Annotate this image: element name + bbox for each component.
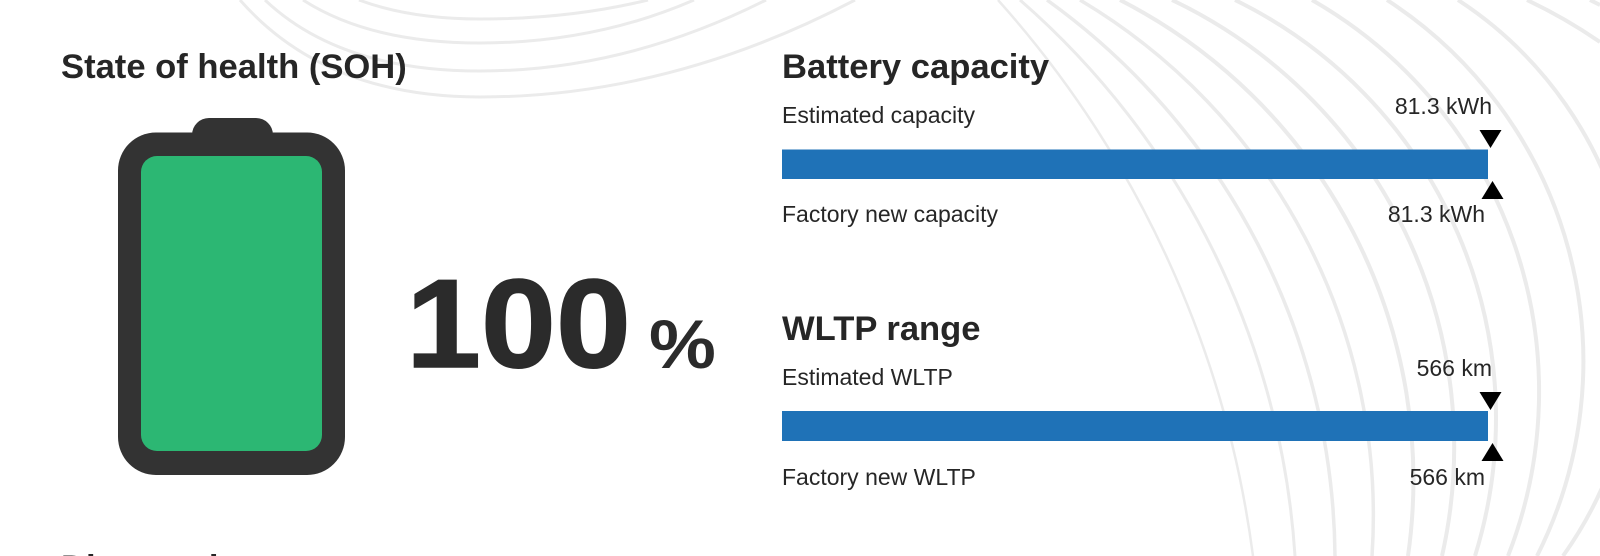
bar: WLTP range (782, 411, 1488, 441)
marker: estimated WLTP (1480, 392, 1502, 410)
value: factory new capacity: 81.3 kWh (1388, 201, 1485, 227)
SOH value: % (649, 307, 716, 383)
value: factory new WLTP: 566 km (1410, 464, 1485, 490)
heading: battery capacity: Battery capacity (782, 48, 1050, 86)
heading: state of health: State of health (SOH) (61, 48, 407, 86)
label: estimated WLTP: Estimated WLTP (782, 364, 953, 390)
value: estimated WLTP: 566 km (1417, 355, 1492, 381)
marker: factory WLTP (1482, 443, 1504, 461)
heading: WLTP range: WLTP range (782, 310, 981, 348)
icon: battery (118, 118, 345, 475)
SOH value: 100 (406, 253, 631, 394)
value: estimated capacity: 81.3 kWh (1395, 93, 1492, 119)
label: factory new capacity: Factory new capacity (782, 201, 999, 227)
bar: battery capacity (782, 150, 1488, 179)
marker: factory capacity (1482, 181, 1504, 199)
label: factory new WLTP: Factory new WLTP (782, 464, 976, 490)
marker: estimated capacity (1480, 130, 1502, 148)
label: estimated capacity: Estimated capacity (782, 102, 976, 128)
